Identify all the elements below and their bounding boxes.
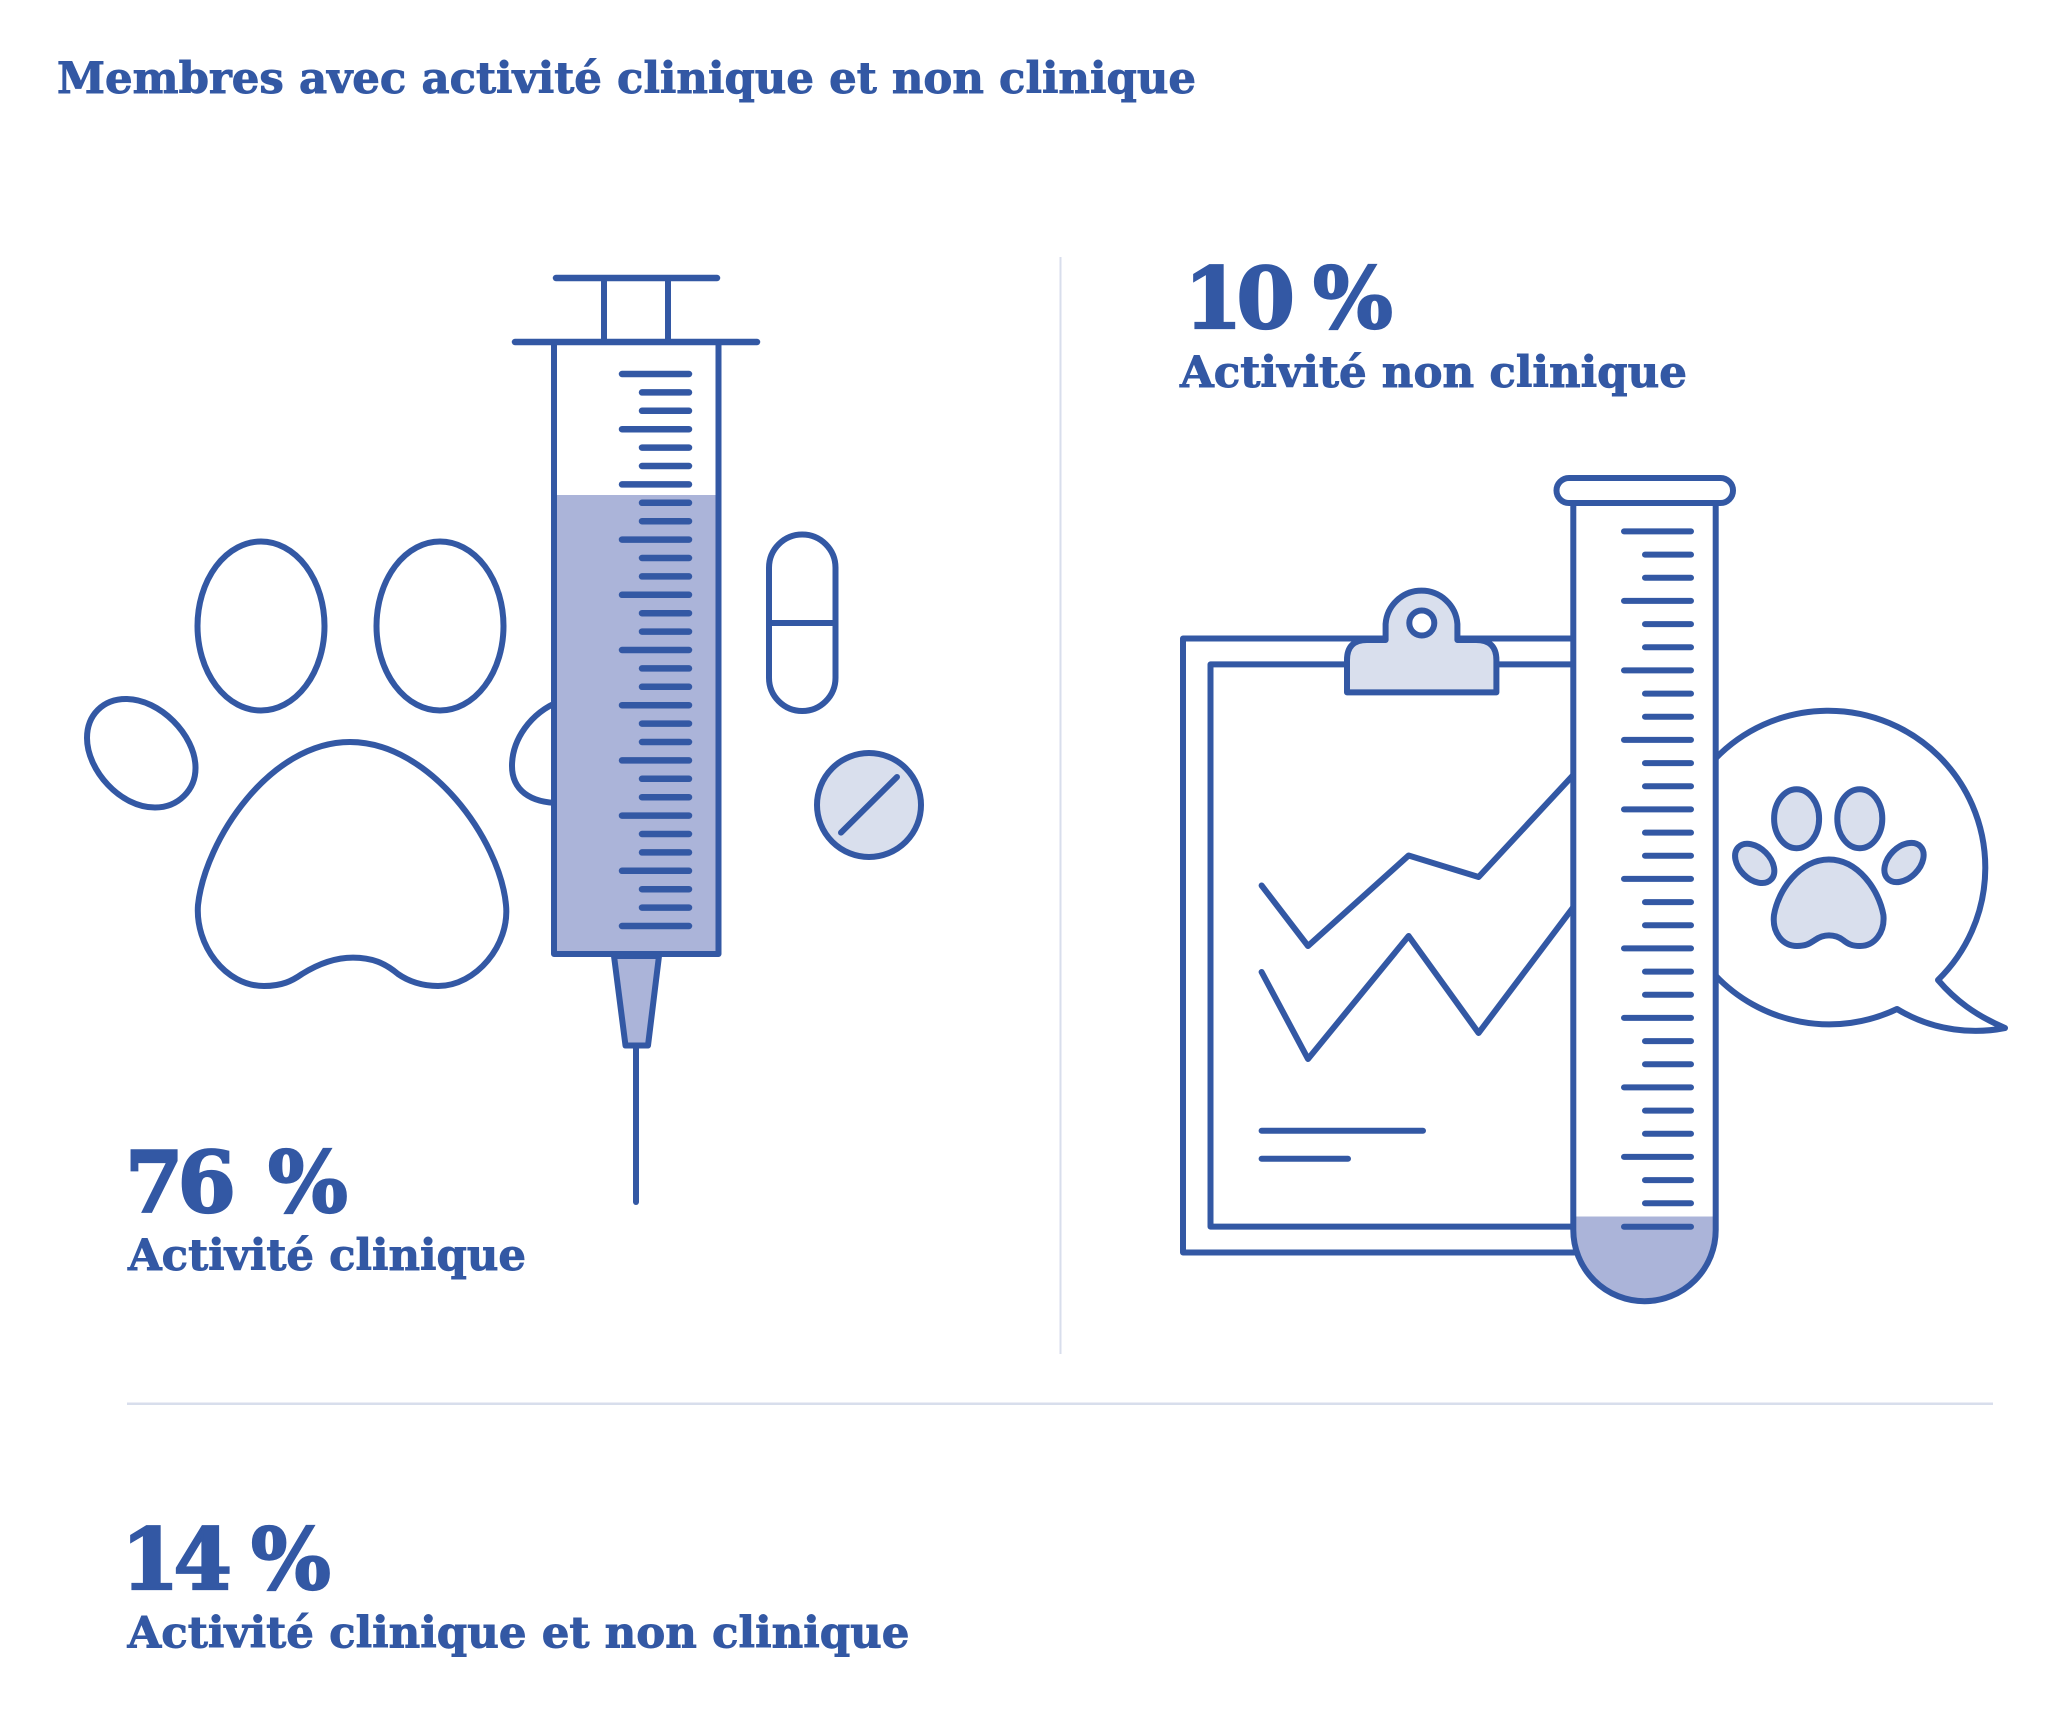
stat: 10 %: % [1313, 249, 1393, 348]
icon: test tube [1556, 478, 1733, 1301]
chart line: upper [1262, 757, 1590, 946]
stat: 10 % [1179, 249, 1687, 398]
icon: speech bubble with paw [1700, 711, 2005, 1031]
stat: 76 %: 76 [125, 1133, 231, 1232]
clip [1347, 591, 1496, 692]
icon: clipboard with charts [1183, 591, 1600, 1252]
stat: 14 %: % [251, 1510, 331, 1609]
icon: syringe [515, 278, 757, 1202]
chart line: lower [1262, 885, 1590, 1059]
stat: 76 %: % [268, 1133, 348, 1232]
label: clinical and non-clinical activity: Activité clinique et non clinique [126, 1609, 910, 1659]
label: clinical activity: Activité clinique [127, 1231, 526, 1281]
label: non-clinical activity: Activité non clinique [1179, 348, 1687, 398]
stat: 14 % [121, 1510, 910, 1659]
title: Membres avec activité clinique et non clinique [57, 54, 1196, 104]
stat: 76 % [125, 1133, 526, 1281]
text lines [1262, 1131, 1423, 1159]
icon: capsule [769, 534, 836, 711]
icon: tablet [817, 753, 921, 857]
icon: paw print [87, 542, 560, 986]
stat: 10 %: 10 [1184, 249, 1291, 348]
stat: 14 %: 14 [121, 1510, 228, 1609]
